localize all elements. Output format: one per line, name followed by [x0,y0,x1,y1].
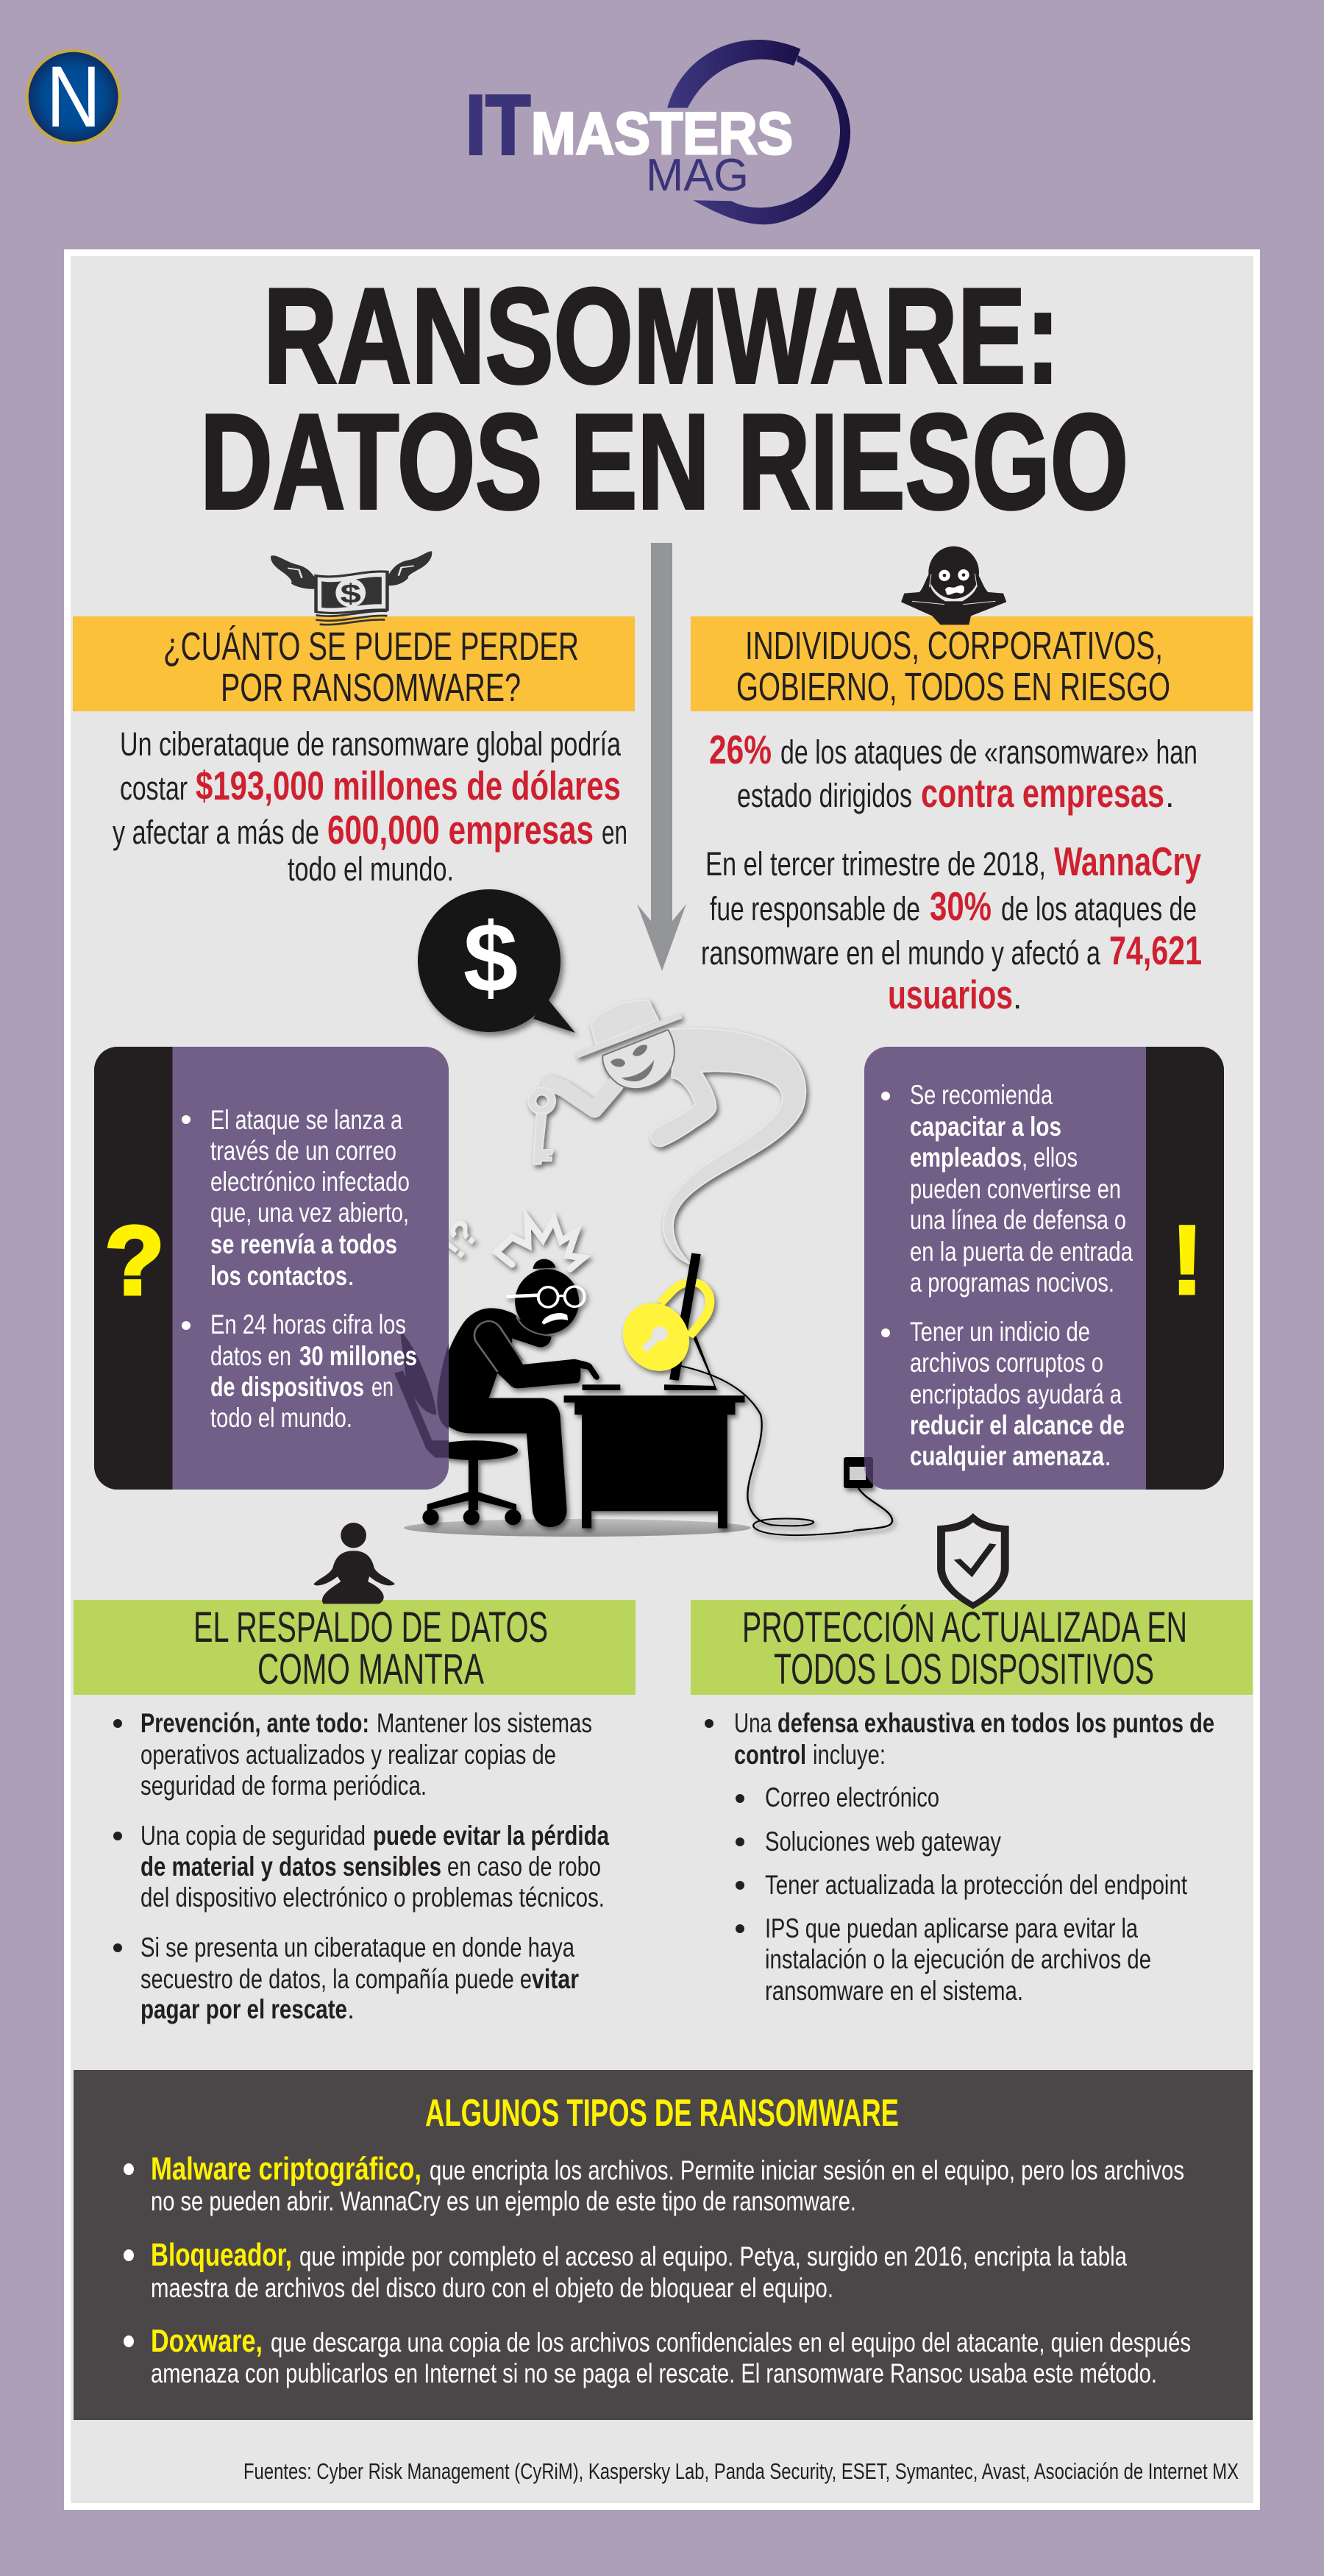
bullet list: empleados [910,1142,1022,1173]
bullet list: Si se presenta un ciberataque en donde haya [140,1932,574,1963]
bullet list: en la puerta de entrada [910,1237,1133,1267]
text: porcentaje de ataques: 26% [709,727,772,772]
bullet list: . [347,1994,355,2024]
icon: meditating person [313,1523,395,1604]
icon: shield with check [937,1513,1009,1609]
bullet list: incluye: [813,1740,886,1770]
icon: scared face [901,547,1006,625]
bullet list: Correo electrónico [765,1782,939,1812]
text: WannaCry: de los ataques de [1001,890,1197,928]
bullet list [182,1105,417,1433]
icon: N circular logo [27,49,120,146]
item: malware criptográfico: Malware criptográfico, [151,2151,421,2187]
text: costo global: $193,000 millones de dólares [196,763,621,808]
bullet list: puede evitar la pérdida [373,1821,609,1851]
heading box: POR RANSOMWARE? [221,666,521,710]
text: costo global: costar [120,769,188,807]
padlock shackle [661,1282,710,1337]
text: porcentaje de ataques: . [1165,777,1175,814]
icon: flying money: $ [341,580,361,608]
item: malware criptográfico [124,2151,1184,2216]
icon: flying money [271,551,432,625]
text: WannaCry: . [1013,978,1022,1016]
bullet list: pagar por el rescate [140,1994,347,2024]
bullet list: control [734,1740,806,1770]
bullet list: Prevención, ante todo: [140,1708,369,1738]
bullet list: pueden convertirse en [910,1174,1121,1204]
white frame and content sheet [64,249,1260,2510]
man body [438,1308,599,1527]
bullet list: los contactos [210,1261,347,1291]
bullet list: que, una vez abierto, [210,1198,409,1228]
bullet list: datos en [210,1341,291,1371]
padlock body [615,1297,697,1377]
text: WannaCry: usuarios [888,972,1013,1017]
illustration seen through panel [394,1331,449,1458]
heading box [691,616,1253,711]
text: costo global: todo el mundo. [288,850,454,888]
bullet list: archivos corruptos o [910,1348,1103,1378]
icon: speech bubble with dollar [418,889,575,1033]
bullet list: todo el mundo. [210,1403,352,1433]
bullet list: El ataque se lanza a [210,1105,402,1135]
outlet seen through panel [864,1457,873,1484]
text: costo global: 600,000 empresas [327,807,594,853]
text: costo global: Un ciberataque de ransomware global podría [120,725,622,763]
text: porcentaje de ataques: contra empresas [921,770,1164,816]
bullet list: de material y datos sensibles [140,1851,441,1882]
logo: IT Masters Mag: MAG [646,150,749,201]
icon: N circular logo: N [46,49,101,146]
keyboard [582,1384,620,1390]
panel: cuánto se puede perder [73,551,635,888]
chair [422,1440,521,1525]
bullet list: electrónico infectado [210,1167,410,1197]
text: costo global: en [602,814,627,851]
icon: speech bubble with dollar: $ [463,903,518,1013]
monitor screen [674,1253,696,1380]
heading box [73,616,635,711]
bullet list: Tener actualizada la protección del endpoint [765,1870,1188,1900]
illustration: ground shadow [404,1519,751,1537]
desk [564,1395,745,1529]
heading: ALGUNOS TIPOS DE RANSOMWARE [425,2092,899,2135]
illustration: hacker ghost with key [528,1000,805,1264]
text: WannaCry: ransomware en el mundo y afectó a [701,934,1101,972]
heading box [691,1600,1253,1695]
arrow: central downward [637,543,686,971]
text: porcentaje de ataques [709,727,1197,816]
panel background [94,1047,449,1490]
bullet list: Se recomienda [910,1080,1053,1110]
bullet list: de dispositivos [210,1372,364,1402]
bullet list: defensa exhaustiva en todos los puntos de [777,1708,1214,1738]
illustration: burst and confused marks: !? [433,1211,488,1266]
item: bloqueador [124,2237,1127,2303]
logo: IT Masters Mag [466,40,850,224]
cable [680,1366,853,1535]
bullet list: capacitar a los [910,1111,1061,1142]
bullet list: IPS que puedan aplicarse para evitar la [765,1913,1138,1943]
bullet list: secuestro de datos, la compañía puede e [140,1964,532,1994]
bullet list: se reenvía a todos [210,1229,397,1259]
panel: cómo funciona el ataque [94,1047,449,1490]
icon: power cable and outlet [844,1457,892,1531]
heading box: COMO MANTRA [257,1645,484,1693]
heading box: ¿CUÁNTO SE PUEDE PERDER [163,625,579,669]
heading box: EL RESPALDO DE DATOS [193,1604,548,1651]
bullet list: a programas nocivos. [910,1267,1114,1298]
bullet list: través de un correo [210,1136,396,1166]
monitor stand [664,1337,717,1390]
text: WannaCry: 30% [930,883,992,929]
panel background [864,1047,1224,1490]
logo: IT Masters Mag: IT [466,79,530,172]
item: malware criptográfico: no se pueden abrir. WannaCry es un ejemplo de este tipo de ransomware. [151,2186,856,2216]
icon: exclamation mark: ! [1171,1206,1203,1315]
panel: protección actualizada [691,1513,1253,2006]
man head [506,1259,585,1336]
text: costo global [113,725,627,888]
bullet list: reducir el alcance de [910,1410,1125,1440]
bullet list: encriptados ayudará a [910,1379,1122,1409]
heading box: INDIVIDUOS, CORPORATIVOS, [745,624,1163,668]
panel: individuos en riesgo [691,547,1253,1017]
text: porcentaje de ataques: estado dirigidos [737,777,912,814]
panel: respaldo de datos [74,1523,636,2024]
text: costo global: y afectar a más de [113,814,319,851]
bullet list: 30 millones [299,1341,417,1371]
bullet list: Mantener los sistemas [377,1708,592,1738]
bullet list [705,1708,1214,2006]
text: WannaCry [701,839,1202,1017]
heading box [74,1600,636,1695]
bullet list: Tener un indicio de [910,1317,1090,1347]
bullet list: ransomware en el sistema. [765,1976,1023,2006]
bullet list: , ellos [1022,1142,1078,1173]
illustration: worried man at desk [422,1253,853,1535]
bullet list [881,1080,1133,1471]
bullet list [113,1708,609,2024]
bullet list: del dispositivo electrónico o problemas técnicos. [140,1882,605,1913]
bullet list: operativos actualizados y realizar copias de [140,1740,556,1770]
item: bloqueador: maestra de archivos del disco duro con el objeto de bloquear el equipo. [151,2273,833,2303]
bullet list: en caso de robo [447,1851,601,1882]
icon: question mark: ? [105,1206,164,1314]
bullet list: Soluciones web gateway [765,1826,1001,1857]
illustration: burst and confused marks [433,1211,583,1269]
text: WannaCry: WannaCry [1054,839,1201,884]
panel: recomendaciones [844,1047,1224,1490]
panel: tipos de ransomware [74,2070,1253,2420]
text: WannaCry: En el tercer trimestre de 2018, [705,845,1046,883]
item: doxware [124,2323,1191,2388]
heading box: TODOS LOS DISPOSITIVOS [774,1645,1154,1693]
bullet list: instalación o la ejecución de archivos de [765,1944,1151,1974]
text: WannaCry: 74,621 [1109,928,1202,973]
bullet list: en [371,1372,394,1402]
bullet list: . [1104,1441,1111,1471]
bullet list: seguridad de forma periódica. [140,1771,427,1801]
bullet list: Una [734,1708,772,1738]
title [200,260,1128,537]
bullet list: En 24 horas cifra los [210,1309,406,1339]
bullet list: . [347,1261,355,1291]
bullet list: Una copia de seguridad [140,1821,366,1851]
bullet list: cualquier amenaza [910,1441,1104,1471]
logo: IT Masters Mag: MASTERS [531,101,793,167]
item: bloqueador: Bloqueador, [151,2237,292,2273]
bullet list: vitar [532,1964,579,1994]
text: porcentaje de ataques: de los ataques de «ransomware» han [780,733,1197,771]
bullet list: una línea de defensa o [910,1205,1126,1235]
title: RANSOMWARE: [263,260,1060,411]
item: bloqueador: que impide por completo el acceso al equipo. Petya, surgido en 2016, encripta la tabla [299,2241,1127,2271]
item: doxware: Doxware, [151,2323,263,2359]
text: WannaCry: fue responsable de [710,890,920,928]
